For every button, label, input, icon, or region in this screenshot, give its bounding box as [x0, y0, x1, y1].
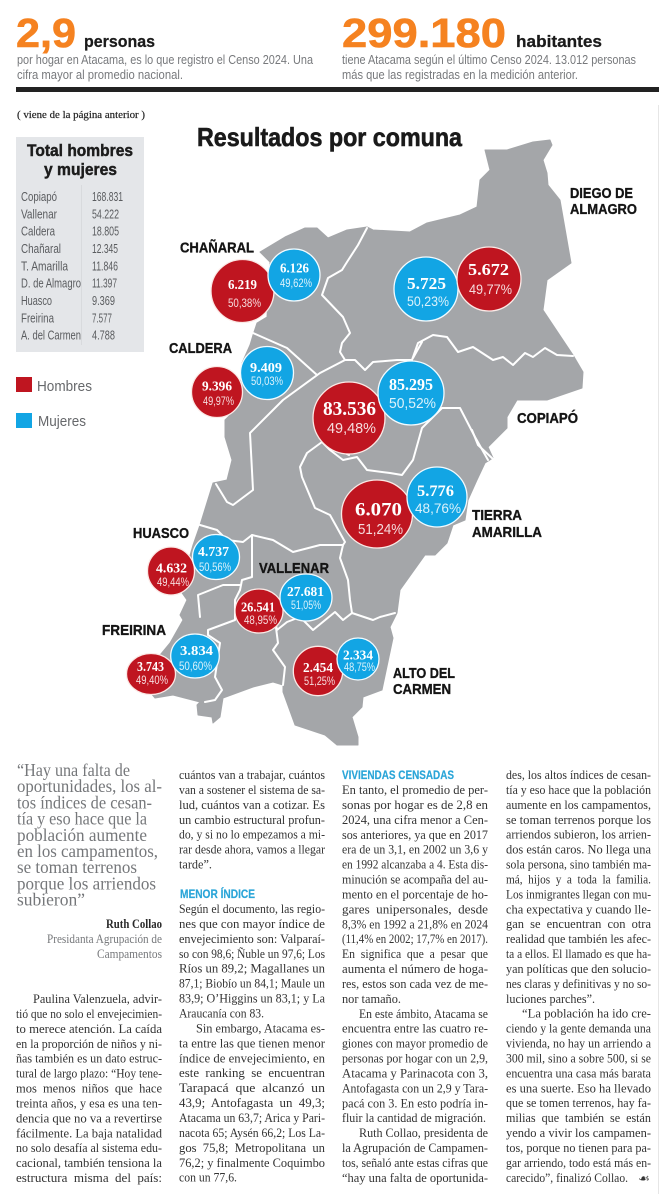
article column 2: este ranking se encuentran	[179, 1066, 326, 1080]
CHAÑARAL: 50,38%	[228, 296, 261, 310]
commune borders	[198, 228, 573, 702]
article column 3: pacá con 3. En esto podría in-	[342, 1095, 488, 1110]
article column 4: tos, porque no tienen para pa-	[506, 1140, 651, 1155]
article column 2: rar desde ahora, vamos a llegar	[179, 842, 326, 857]
article column 1: to merece atención. La caída	[16, 1021, 162, 1036]
subheading: menor índice: MENOR ÍNDICE	[180, 886, 255, 901]
article column 2: tarde”.	[179, 856, 212, 872]
article column 3: gares unipersonales, desde	[342, 902, 488, 916]
ALTO DEL CARMEN: ALTO DEL	[393, 666, 455, 682]
article column 1: dencia que no va a revertirse	[16, 1110, 162, 1125]
article column 4: gan se encuentran con otra	[506, 917, 651, 931]
article column 3: minución se acompaña del au-	[342, 872, 488, 886]
table rows: A. del Carmen	[21, 328, 81, 343]
article column 3: en 1992 alcanzaba a 4. Esta dis-	[342, 857, 488, 872]
article column 1: treinta años, y esa es una ten-	[16, 1095, 162, 1110]
page note: ( viene de la página anterior )	[17, 109, 145, 121]
article column 3: (11,4% en 2002; 17,7% en 2017).	[342, 931, 488, 946]
VALLENAR: 26.541	[241, 600, 275, 616]
article column 1: mos menos niños que hace	[16, 1082, 162, 1096]
table rows: 11.397	[92, 276, 117, 291]
article column 4: yendo a vivir los campamen-	[506, 1125, 651, 1140]
FREIRINA	[102, 623, 219, 694]
VALLENAR: 27.681	[287, 585, 324, 600]
CALDERA: 9.409	[250, 361, 282, 376]
article column 2: ta entre las que tienen menor	[179, 1035, 326, 1050]
table rows: 54.222	[92, 206, 119, 221]
article column 3: encuentra entre las cuatro re-	[342, 1021, 488, 1036]
stat: 299.180 habitantes	[342, 10, 636, 82]
article column 2: 43,9; Antofagasta un 49,3;	[179, 1096, 325, 1110]
article column 3: En este ámbito, Atacama se	[359, 1006, 488, 1021]
stat: 2,9 personas	[16, 10, 313, 82]
HUASCO: 4.737	[198, 545, 229, 560]
pull quote: “Hay una falta de	[17, 760, 130, 780]
TIERRA AMARILLA: TIERRA	[472, 508, 522, 524]
COPIAPÓ: 83.536	[323, 398, 376, 420]
article column 3: giones con mayor promedio de	[342, 1036, 488, 1051]
article column 2: envejecimiento son: Valparaí-	[179, 931, 325, 946]
VALLENAR: 48,95%	[244, 613, 277, 627]
article column 3: nor tamaño.	[342, 991, 401, 1006]
pull quote: población aumente	[17, 825, 147, 845]
article column 2: Araucanía con 83.	[179, 1006, 264, 1020]
DIEGO DE ALMAGRO: 5.725	[407, 274, 446, 293]
article column 3: res, estos son cada vez de me-	[342, 976, 488, 991]
table rows: Chañaral	[21, 241, 61, 256]
article column 4: realidad que también les afec-	[506, 931, 651, 946]
article column 2: cuántos van a trabajar, cuántos	[179, 767, 325, 782]
article column 2: gos 75,8; Metropolitana un	[179, 1141, 326, 1155]
article column 4: arriendos subieron, los arrien-	[506, 827, 651, 842]
CHAÑARAL: 6.126	[280, 262, 309, 276]
article column 4: es una suerte. Eso ha llevado	[506, 1080, 651, 1095]
pull quote: en los campamentos,	[17, 841, 158, 861]
subheading: viviendas censadas: VIVIENDAS CENSADAS	[342, 768, 454, 782]
article column 2: so con 98,6; Ñuble un 97,6; Los	[179, 946, 325, 961]
article column 3: era de un 3,1, en 2002 un 3,6 y	[342, 842, 488, 857]
VALLENAR: VALLENAR	[259, 561, 329, 577]
article column 2: nes que con mayor índice de	[179, 916, 325, 931]
DIEGO DE ALMAGRO: 5.672	[468, 260, 509, 279]
VALLENAR: 51,05%	[291, 598, 321, 612]
article column 4: cha expectativa y cuando lle-	[506, 901, 651, 916]
CALDERA: 49,97%	[203, 394, 234, 408]
article column 2: un cambio estructural profun-	[179, 812, 325, 827]
table rows: 18.805	[92, 224, 119, 239]
article column 4: milias que también se están	[506, 1111, 652, 1125]
article column 3	[342, 768, 488, 1185]
table rows: 168.831	[92, 189, 123, 204]
article column 1: fácilmente. La baja natalidad	[16, 1125, 162, 1140]
pull quote: tía y eso hace que la	[17, 809, 147, 829]
end mark: ☙	[638, 1172, 650, 1185]
article column 1: cacional, también tensiona la	[16, 1155, 162, 1170]
FREIRINA: 3.743	[137, 660, 164, 675]
article column 3: sonas por hogar es de 2,8 en	[342, 797, 488, 812]
HUASCO	[133, 526, 240, 595]
stat: 2,9 personas: 2,9	[16, 10, 76, 56]
TIERRA AMARILLA: 51,24%	[358, 521, 403, 538]
article column 2: van a sostener el sistema de sa-	[179, 782, 325, 797]
stat: 2,9 personas: personas	[84, 32, 155, 51]
article column 3: Atacama y Parinacota con 3,	[342, 1066, 488, 1080]
TIERRA AMARILLA: AMARILLA	[472, 525, 542, 541]
panel heading: y mujeres	[44, 161, 117, 179]
COPIAPÓ: COPIAPÓ	[517, 409, 578, 427]
DIEGO DE ALMAGRO: 50,23%	[407, 293, 449, 309]
ALTO DEL CARMEN	[293, 638, 455, 698]
article column 2: do, y si no lo empezamos a mi-	[179, 827, 325, 842]
CHAÑARAL: 6.219	[228, 278, 257, 293]
article column 2: nacota 65; Aysén 66,2; Los La-	[179, 1125, 325, 1140]
table rows: 9.369	[92, 293, 115, 308]
ALTO DEL CARMEN: 51,25%	[304, 674, 335, 688]
article column 4: se toman terrenos porque los	[506, 812, 651, 827]
table rows: Copiapó	[21, 189, 57, 204]
article column 2: lud, cuántos van a cotizar. Es	[179, 797, 325, 812]
article column 2: Según el documento, las regio-	[179, 901, 325, 916]
TIERRA AMARILLA: 48,76%	[415, 500, 461, 516]
table rows: Freirina	[21, 310, 55, 325]
table rows: Huasco	[21, 293, 52, 308]
article column 4: que se tomen terrenos, hay fa-	[506, 1095, 651, 1110]
quote attribution	[47, 917, 162, 961]
article column 1: tió que no solo el envejecimien-	[16, 1006, 162, 1021]
article column 3: “hay una falta de oportunida-	[342, 1170, 488, 1185]
pull quote: tos índices de cesan-	[17, 792, 152, 812]
article column 2	[179, 767, 326, 1185]
ALTO DEL CARMEN: 2.334	[343, 648, 373, 664]
VALLENAR	[235, 561, 332, 633]
article column 4: encuentra una casa más barata	[506, 1065, 651, 1080]
HUASCO: HUASCO	[133, 526, 189, 542]
CALDERA: 50,03%	[251, 374, 283, 388]
table rows: Caldera	[21, 224, 56, 239]
article column 1: estructura misma del país:	[16, 1171, 162, 1185]
COPIAPÓ	[313, 361, 578, 454]
map: Atacama communes	[102, 140, 637, 745]
legend	[16, 377, 92, 430]
article column 3: 2024, una cifra menor a Cen-	[342, 812, 488, 827]
article column 3: la Agrupación de Campamen-	[342, 1140, 488, 1155]
pull quote: subieron”	[17, 890, 85, 910]
article column 1: tural de largo plazo: “Hoy tene-	[16, 1066, 162, 1081]
CHAÑARAL: CHAÑARAL	[180, 238, 254, 256]
article column 1	[16, 991, 162, 1185]
article column 2: 76,2; y finalmente Coquimbo	[179, 1155, 325, 1170]
FREIRINA: FREIRINA	[102, 623, 166, 639]
article column 3: aumenta el número de hoga-	[342, 961, 488, 976]
article column 2: Sin embargo, Atacama es-	[196, 1020, 325, 1035]
article column 3: tos, señaló ante estas cifras que	[342, 1155, 488, 1170]
article column 4: “La población ha ido cre-	[522, 1006, 651, 1021]
table rows: D. de Almagro	[21, 276, 81, 291]
stat: 299.180 habitantes: 299.180	[342, 10, 506, 56]
article column 4: carecido”, finalizó Collao.	[506, 1170, 628, 1185]
TIERRA AMARILLA: 6.070	[355, 500, 402, 520]
legend: Hombres	[37, 378, 92, 395]
CALDERA	[169, 341, 294, 418]
COPIAPÓ: 85.295	[389, 375, 433, 394]
article column 1: Paulina Valenzuela, advir-	[33, 991, 162, 1006]
ALTO DEL CARMEN: 2.454	[303, 661, 333, 676]
table rows: 11.846	[92, 258, 118, 273]
article column 3: 8,3% en 1992 a 21,8% en 2024	[342, 916, 488, 931]
article column 4	[506, 767, 652, 1185]
article column 3: personas por hogar con un 2,9,	[342, 1051, 488, 1066]
article column 3: Antofagasta con un 2,9 y Tara-	[342, 1080, 488, 1095]
pull quote: se toman terrenos	[17, 857, 137, 877]
ALTO DEL CARMEN: 48,75%	[344, 660, 375, 674]
article column 1: ñas también es un dato estruc-	[16, 1051, 162, 1066]
table rows	[21, 189, 123, 343]
pull quote	[17, 760, 162, 961]
article column 3: Ruth Collao, presidenta de	[359, 1125, 488, 1140]
article column 2: 83,9; O’Higgins un 83,1; y La	[179, 991, 325, 1006]
pull quote: porque los arriendos	[17, 873, 156, 893]
HUASCO: 4.632	[156, 562, 187, 576]
region outline	[140, 140, 583, 745]
HUASCO: 49,44%	[157, 575, 189, 589]
CHAÑARAL	[180, 238, 320, 322]
DIEGO DE ALMAGRO: DIEGO DE	[570, 186, 633, 202]
CHAÑARAL: 49,62%	[280, 276, 312, 290]
article column 2: índice de envejecimiento, en	[179, 1050, 325, 1065]
FREIRINA: 3.834	[180, 644, 213, 659]
article column 3: fluir la cantidad de migración.	[342, 1110, 486, 1125]
DIEGO DE ALMAGRO	[394, 186, 637, 321]
DIEGO DE ALMAGRO: ALMAGRO	[570, 202, 637, 218]
article column 4: dos están caros. No llega una	[506, 842, 651, 857]
table rows: 7.577	[92, 310, 112, 325]
article column 2: Ríos un 89,2; Magallanes un	[179, 961, 325, 976]
quote attribution: Ruth Collao	[106, 917, 162, 931]
COPIAPÓ: 50,52%	[389, 395, 436, 412]
TIERRA AMARILLA	[342, 467, 542, 548]
table rows: T. Amarilla	[21, 258, 69, 273]
article column 4: luciones parches”.	[506, 991, 595, 1006]
FREIRINA: 49,40%	[136, 673, 168, 687]
FREIRINA: 50,60%	[179, 659, 212, 673]
table rows: 4.788	[92, 328, 115, 343]
article column 1: no solo desafía al sistema edu-	[16, 1140, 162, 1155]
quote attribution: Campamentos	[97, 947, 162, 961]
article column 2: Tarapacá que alcanzó un	[179, 1081, 326, 1095]
table rows: Vallenar	[21, 206, 58, 221]
article column 2: con un 77,6.	[179, 1170, 237, 1185]
title: Resultados por comuna	[197, 122, 462, 152]
article column 2: 87,1; Biobío un 84,1; Maule un	[179, 976, 325, 991]
CALDERA: 9.396	[202, 380, 232, 394]
CALDERA: CALDERA	[169, 341, 232, 357]
pull quote: oportunidades, los al-	[17, 776, 162, 796]
article column 3: En tanto, el promedio de per-	[342, 782, 488, 797]
DIEGO DE ALMAGRO: 49,77%	[469, 281, 512, 297]
stat: 299.180 habitantes: habitantes	[516, 32, 602, 51]
ALTO DEL CARMEN: CARMEN	[393, 682, 451, 698]
article column 3: mento en el porcentaje de ho-	[342, 886, 488, 901]
HUASCO: 50,56%	[199, 560, 231, 574]
stat: 299.180 habitantes: más que las registradas en la medición anterior.	[342, 68, 578, 82]
article column 1: en la proporción de niños y ni-	[16, 1036, 162, 1051]
panel heading	[27, 142, 133, 179]
legend: Mujeres	[38, 413, 86, 430]
panel: total hombres y mujeres	[16, 137, 144, 352]
quote attribution: Presidanta Agrupación de	[47, 932, 162, 946]
article column 3: En significa que a pesar que	[342, 947, 488, 961]
article column 3: sos anteriores, ya que en 2017	[342, 827, 488, 842]
article column 4: aumente en los campamentos,	[506, 797, 651, 812]
article column 2: Atacama un 63,7; Arica y Pari-	[179, 1110, 325, 1125]
article column 4: yan políticas que den solucio-	[506, 961, 651, 976]
stat: 2,9 personas: cifra mayor al promedio nacional.	[17, 68, 183, 82]
panel heading: Total hombres	[27, 142, 133, 160]
table rows: 12.345	[92, 241, 118, 256]
stat: 2,9 personas: por hogar en Atacama, es lo que registro el Censo 2024. Una	[17, 53, 313, 67]
TIERRA AMARILLA: 5.776	[417, 483, 454, 500]
COPIAPÓ: 49,48%	[327, 420, 376, 437]
